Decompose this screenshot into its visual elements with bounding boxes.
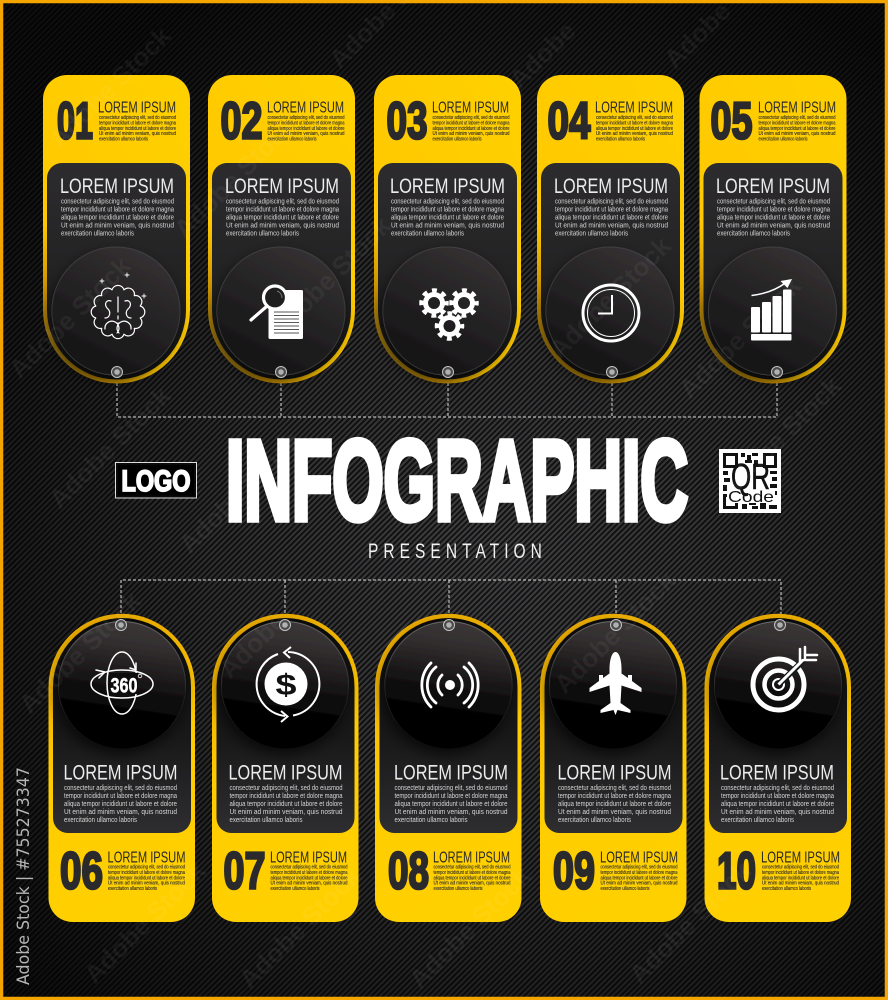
connector node 01 — [112, 366, 122, 378]
small text 02: tempor incididunt ut labore et dolore magna — [268, 120, 345, 126]
connector node 07 — [280, 620, 290, 630]
panel text 03: tempor incididunt ut labore et dolore magna — [391, 204, 505, 213]
card 03 — [374, 75, 521, 383]
faint stock watermarks: Adobe Stock — [263, 210, 397, 344]
panel text 06: exercitation ullamco laboris — [64, 815, 137, 824]
card 05 — [700, 75, 846, 383]
small text 10 — [762, 864, 840, 892]
heading 01: LOREM IPSUM — [98, 100, 176, 116]
small text 02: Ut enim ad minim veniam, quis nostrud — [268, 131, 344, 137]
card 07 — [212, 614, 358, 922]
panel text 01: exercitation ullamco laboris — [61, 228, 134, 237]
faint stock watermarks: Adobe Stock — [403, 860, 537, 994]
panel text 10 — [721, 783, 835, 824]
small text 06 — [108, 864, 186, 892]
card 08 — [375, 614, 522, 922]
small text 03 — [432, 115, 510, 143]
number 06: 06 — [60, 842, 103, 900]
small text 03: Ut enim ad minim veniam, quis nostrud — [432, 131, 510, 137]
faint stock watermarks: Adobe Stock — [3, 250, 137, 384]
connector node 09 — [610, 620, 622, 630]
small text 07 — [270, 864, 348, 892]
panel text 03: exercitation ullamco laboris — [391, 228, 464, 237]
small text 05: aliqua tempor incididunt ut labore et dolore — [758, 126, 836, 132]
small text 03: tempor incididunt ut labore et dolore magna — [432, 120, 510, 126]
panel text 01: aliqua tempor incididunt ut labore et dolore — [61, 212, 174, 221]
icon: airplane — [590, 652, 642, 715]
small text 08: consectetur adipiscing elit, sed do eiusmod — [434, 864, 510, 870]
small text 08: exercitation ullamco laboris — [434, 886, 483, 892]
panel text 02: exercitation ullamco laboris — [226, 228, 299, 237]
panel text 02: aliqua tempor incididunt ut labore et dolore — [226, 212, 339, 221]
side stock credit: Adobe Stock | #755273347 — [14, 767, 34, 985]
small text 08: aliqua tempor incididunt ut labore et dolore — [434, 875, 510, 881]
card 06 — [48, 614, 195, 922]
icon: broadcast signal — [422, 663, 478, 707]
panel text 10: Ut enim ad minim veniam, quis nostrud — [721, 807, 834, 816]
small text 04: consectetur adipiscing elit, sed do eiusmod — [596, 115, 673, 121]
connector node 06 — [116, 620, 126, 630]
panel text 05: Ut enim ad minim veniam, quis nostrud — [717, 220, 830, 229]
small text 07: aliqua tempor incididunt ut labore et dolore — [270, 875, 348, 881]
heading 04: LOREM IPSUM — [595, 100, 673, 116]
small text 05: exercitation ullamco laboris — [758, 137, 808, 143]
small text 01: Ut enim ad minim veniam, quis nostrud — [99, 131, 176, 137]
panel text 06 — [64, 783, 178, 824]
faint stock watermarks: Adobe Stock — [233, 860, 367, 994]
connector node 10 — [774, 620, 786, 630]
panel text 04: tempor incididunt ut labore et dolore magna — [555, 204, 669, 213]
panel text 08: exercitation ullamco laboris — [394, 815, 468, 824]
small text 06: exercitation ullamco laboris — [108, 886, 157, 892]
panel text 07 — [230, 783, 343, 824]
panel heading 06: LOREM IPSUM — [64, 760, 178, 784]
small text 09: aliqua tempor incididunt ut labore et dolore — [600, 875, 678, 881]
panel heading 10: LOREM IPSUM — [720, 760, 834, 784]
panel text 07: consectetur adipiscing elit, sed do eiusmod — [230, 783, 342, 792]
panel text 08: aliqua tempor incididunt ut labore et dolore — [394, 799, 508, 808]
small text 03: consectetur adipiscing elit, sed do eiusmod — [432, 115, 510, 121]
panel heading 07: LOREM IPSUM — [228, 760, 342, 784]
panel text 10: tempor incididunt ut labore et dolore magna — [721, 791, 835, 800]
panel text 02 — [226, 196, 340, 237]
panel text 09 — [558, 783, 672, 824]
small text 05: Ut enim ad minim veniam, quis nostrud — [758, 131, 836, 137]
number 05: 05 — [710, 92, 752, 150]
heading 07: LOREM IPSUM — [270, 850, 347, 866]
icon: brain — [91, 273, 146, 339]
faint stock watermarks: Adobe Stock — [13, 585, 147, 719]
panel heading 05: LOREM IPSUM — [716, 174, 830, 198]
faint stock watermarks: Adobe Stock — [43, 20, 177, 154]
small text 01: exercitation ullamco laboris — [99, 137, 148, 143]
panel text 04: aliqua tempor incididunt ut labore et dolore — [555, 212, 668, 221]
faint stock watermarks: Adobe — [213, 606, 291, 684]
heading 08: LOREM IPSUM — [433, 850, 510, 866]
small text 02: exercitation ullamco laboris — [268, 137, 317, 143]
small text 03: aliqua tempor incididunt ut labore et dolore — [432, 126, 510, 132]
panel text 01: consectetur adipiscing elit, sed do eiusmod — [61, 196, 174, 205]
number 09: 09 — [553, 842, 595, 900]
small text 04 — [596, 115, 674, 143]
small text 05: consectetur adipiscing elit, sed do eiusmod — [758, 115, 836, 121]
faint stock watermarks: Adobe Stock — [78, 855, 212, 989]
faint stock watermarks: Adobe Stock — [173, 425, 307, 559]
panel text 01 — [61, 196, 175, 237]
small text 10: consectetur adipiscing elit, sed do eiusmod — [762, 864, 839, 870]
small text 06: consectetur adipiscing elit, sed do eiusmod — [108, 864, 185, 870]
panel text 06: consectetur adipiscing elit, sed do eiusmod — [64, 783, 177, 792]
dashed connector: bottom row — [121, 580, 781, 618]
small text 10: aliqua tempor incididunt ut labore et dolore — [762, 875, 839, 881]
heading 10: LOREM IPSUM — [761, 850, 840, 866]
connector node 04 — [606, 366, 618, 378]
card 04 — [537, 75, 684, 383]
small text 06: tempor incididunt ut labore et dolore magna — [108, 870, 186, 876]
icon: clock — [583, 285, 639, 341]
faint stock watermarks: Adobe Stock — [43, 380, 177, 514]
panel text 08: Ut enim ad minim veniam, quis nostrud — [394, 807, 508, 816]
small text 02 — [268, 115, 345, 143]
panel heading 09: LOREM IPSUM — [558, 760, 672, 784]
panel text 04: exercitation ullamco laboris — [555, 228, 628, 237]
number 04: 04 — [548, 92, 591, 150]
small text 01: aliqua tempor incididunt ut labore et dolore — [99, 126, 176, 132]
faint stock watermarks: Adobe Stock — [548, 565, 682, 699]
small text 07: exercitation ullamco laboris — [270, 886, 320, 892]
QR code: Code — [728, 489, 774, 506]
panel text 06: Ut enim ad minim veniam, quis nostrud — [64, 807, 177, 816]
number 07: 07 — [224, 842, 266, 900]
panel text 02: Ut enim ad minim veniam, quis nostrud — [226, 220, 339, 229]
panel text 06: aliqua tempor incididunt ut labore et dolore — [64, 799, 177, 808]
panel text 03 — [391, 196, 505, 237]
small text 03: exercitation ullamco laboris — [432, 137, 482, 143]
small text 02: aliqua tempor incididunt ut labore et dolore — [268, 126, 344, 132]
faint stock watermarks: Adobe Stock — [673, 270, 807, 404]
small text 04: Ut enim ad minim veniam, quis nostrud — [596, 131, 673, 137]
small text 10: exercitation ullamco laboris — [762, 886, 811, 892]
small text 01: consectetur adipiscing elit, sed do eiusmod — [99, 115, 176, 121]
faint stock watermarks: Adobe — [503, 16, 581, 94]
icon: dollar exchange: $ — [276, 669, 297, 702]
panel text 05: tempor incididunt ut labore et dolore magna — [717, 204, 831, 213]
small text 05 — [758, 115, 836, 143]
panel text 01: Ut enim ad minim veniam, quis nostrud — [61, 220, 174, 229]
panel text 02: tempor incididunt ut labore et dolore magna — [226, 204, 340, 213]
connector node 05 — [772, 366, 782, 378]
small text 08: tempor incididunt ut labore et dolore magna — [434, 870, 511, 876]
panel text 05 — [717, 196, 831, 237]
panel text 09: exercitation ullamco laboris — [558, 815, 631, 824]
subtitle: PRESENTATION — [368, 539, 542, 563]
faint stock watermarks: Adobe Stock — [168, 110, 302, 244]
small text 10: tempor incididunt ut labore et dolore magna — [762, 870, 840, 876]
card 02 — [208, 75, 355, 383]
panel text 07: Ut enim ad minim veniam, quis nostrud — [230, 807, 342, 816]
small text 05: tempor incididunt ut labore et dolore magna — [758, 120, 836, 126]
connector node 03 — [442, 366, 454, 378]
small text 04: tempor incididunt ut labore et dolore magna — [596, 120, 674, 126]
panel text 07: tempor incididunt ut labore et dolore magna — [230, 791, 343, 800]
small text 06: aliqua tempor incididunt ut labore et dolore — [108, 875, 185, 881]
small text 07: Ut enim ad minim veniam, quis nostrud — [270, 881, 348, 887]
dashed connector: top row — [117, 378, 777, 417]
panel text 04: consectetur adipiscing elit, sed do eiusmod — [555, 196, 668, 205]
panel text 03: Ut enim ad minim veniam, quis nostrud — [391, 220, 504, 229]
heading 03: LOREM IPSUM — [432, 100, 509, 116]
number 01: 01 — [57, 92, 93, 150]
panel text 05: consectetur adipiscing elit, sed do eiusmod — [717, 196, 830, 205]
panel text 10: consectetur adipiscing elit, sed do eiusmod — [721, 783, 834, 792]
panel text 08: tempor incididunt ut labore et dolore magna — [394, 791, 508, 800]
heading 02: LOREM IPSUM — [267, 100, 344, 116]
icon: 360 degrees — [91, 652, 153, 714]
number 08: 08 — [388, 842, 429, 900]
small text 09: exercitation ullamco laboris — [600, 886, 650, 892]
small text 02: consectetur adipiscing elit, sed do eiusmod — [268, 115, 344, 121]
connector node 08 — [444, 620, 454, 630]
small text 04: aliqua tempor incididunt ut labore et dolore — [596, 126, 673, 132]
small text 04: exercitation ullamco laboris — [596, 137, 645, 143]
card 09 — [540, 614, 686, 922]
panel heading 04: LOREM IPSUM — [554, 174, 668, 198]
heading 05: LOREM IPSUM — [758, 100, 836, 116]
panel text 09: aliqua tempor incididunt ut labore et dolore — [558, 799, 671, 808]
faint stock watermarks: Adobe Stock — [543, 230, 677, 364]
small text 09: Ut enim ad minim veniam, quis nostrud — [600, 881, 678, 887]
logo badge: LOGO — [122, 465, 190, 498]
small text 09: consectetur adipiscing elit, sed do eiusmod — [600, 864, 678, 870]
card 10 — [704, 614, 851, 922]
icon: 360 degrees: 360 — [110, 674, 138, 698]
faint stock watermarks: Adobe Stock — [623, 855, 757, 989]
small text 07: consectetur adipiscing elit, sed do eiusmod — [270, 864, 348, 870]
panel text 07: exercitation ullamco laboris — [230, 815, 303, 824]
icon: target with arrow — [753, 647, 817, 710]
small text 08 — [434, 864, 511, 892]
small text 06: Ut enim ad minim veniam, quis nostrud — [108, 881, 185, 887]
panel text 07: aliqua tempor incididunt ut labore et dolore — [230, 799, 342, 808]
panel heading 02: LOREM IPSUM — [225, 174, 339, 198]
panel text 03: consectetur adipiscing elit, sed do eiusmod — [391, 196, 504, 205]
panel heading 01: LOREM IPSUM — [60, 174, 174, 198]
faint stock watermarks: Adobe Stock — [713, 370, 847, 504]
panel text 05: exercitation ullamco laboris — [717, 228, 790, 237]
panel text 08 — [394, 783, 508, 824]
small text 09: tempor incididunt ut labore et dolore magna — [600, 870, 678, 876]
icon: dollar exchange — [257, 647, 319, 722]
panel text 01: tempor incididunt ut labore et dolore magna — [61, 204, 175, 213]
panel text 08: consectetur adipiscing elit, sed do eiusmod — [394, 783, 508, 792]
panel text 09: consectetur adipiscing elit, sed do eiusmod — [558, 783, 671, 792]
card 01 — [43, 75, 190, 383]
panel text 09: Ut enim ad minim veniam, quis nostrud — [558, 807, 671, 816]
connector node 02 — [276, 366, 286, 378]
icon: growth bar chart — [751, 279, 792, 340]
small text 01: tempor incididunt ut labore et dolore magna — [99, 120, 177, 126]
number 10: 10 — [717, 842, 756, 900]
panel heading 03: LOREM IPSUM — [390, 174, 505, 198]
QR code — [719, 449, 781, 513]
panel text 03: aliqua tempor incididunt ut labore et dolore — [391, 212, 504, 221]
heading 06: LOREM IPSUM — [108, 850, 186, 866]
small text 07: tempor incididunt ut labore et dolore magna — [270, 870, 348, 876]
icon: magnifier over document — [251, 286, 303, 339]
small text 01 — [99, 115, 177, 143]
small text 09 — [600, 864, 678, 892]
panel text 09: tempor incididunt ut labore et dolore magna — [558, 791, 672, 800]
heading 09: LOREM IPSUM — [600, 850, 678, 866]
panel heading 08: LOREM IPSUM — [394, 760, 508, 784]
panel text 06: tempor incididunt ut labore et dolore magna — [64, 791, 178, 800]
small text 08: Ut enim ad minim veniam, quis nostrud — [434, 881, 510, 887]
panel text 10: exercitation ullamco laboris — [721, 815, 794, 824]
panel text 05: aliqua tempor incididunt ut labore et dolore — [717, 212, 830, 221]
small text 10: Ut enim ad minim veniam, quis nostrud — [762, 881, 839, 887]
panel text 04 — [555, 196, 669, 237]
panel text 02: consectetur adipiscing elit, sed do eiusmod — [226, 196, 339, 205]
panel text 04: Ut enim ad minim veniam, quis nostrud — [555, 220, 668, 229]
panel text 10: aliqua tempor incididunt ut labore et dolore — [721, 799, 834, 808]
number 02: 02 — [220, 92, 262, 150]
QR code: QR — [731, 456, 770, 497]
number 03: 03 — [386, 92, 428, 150]
icon: gears — [422, 290, 476, 338]
